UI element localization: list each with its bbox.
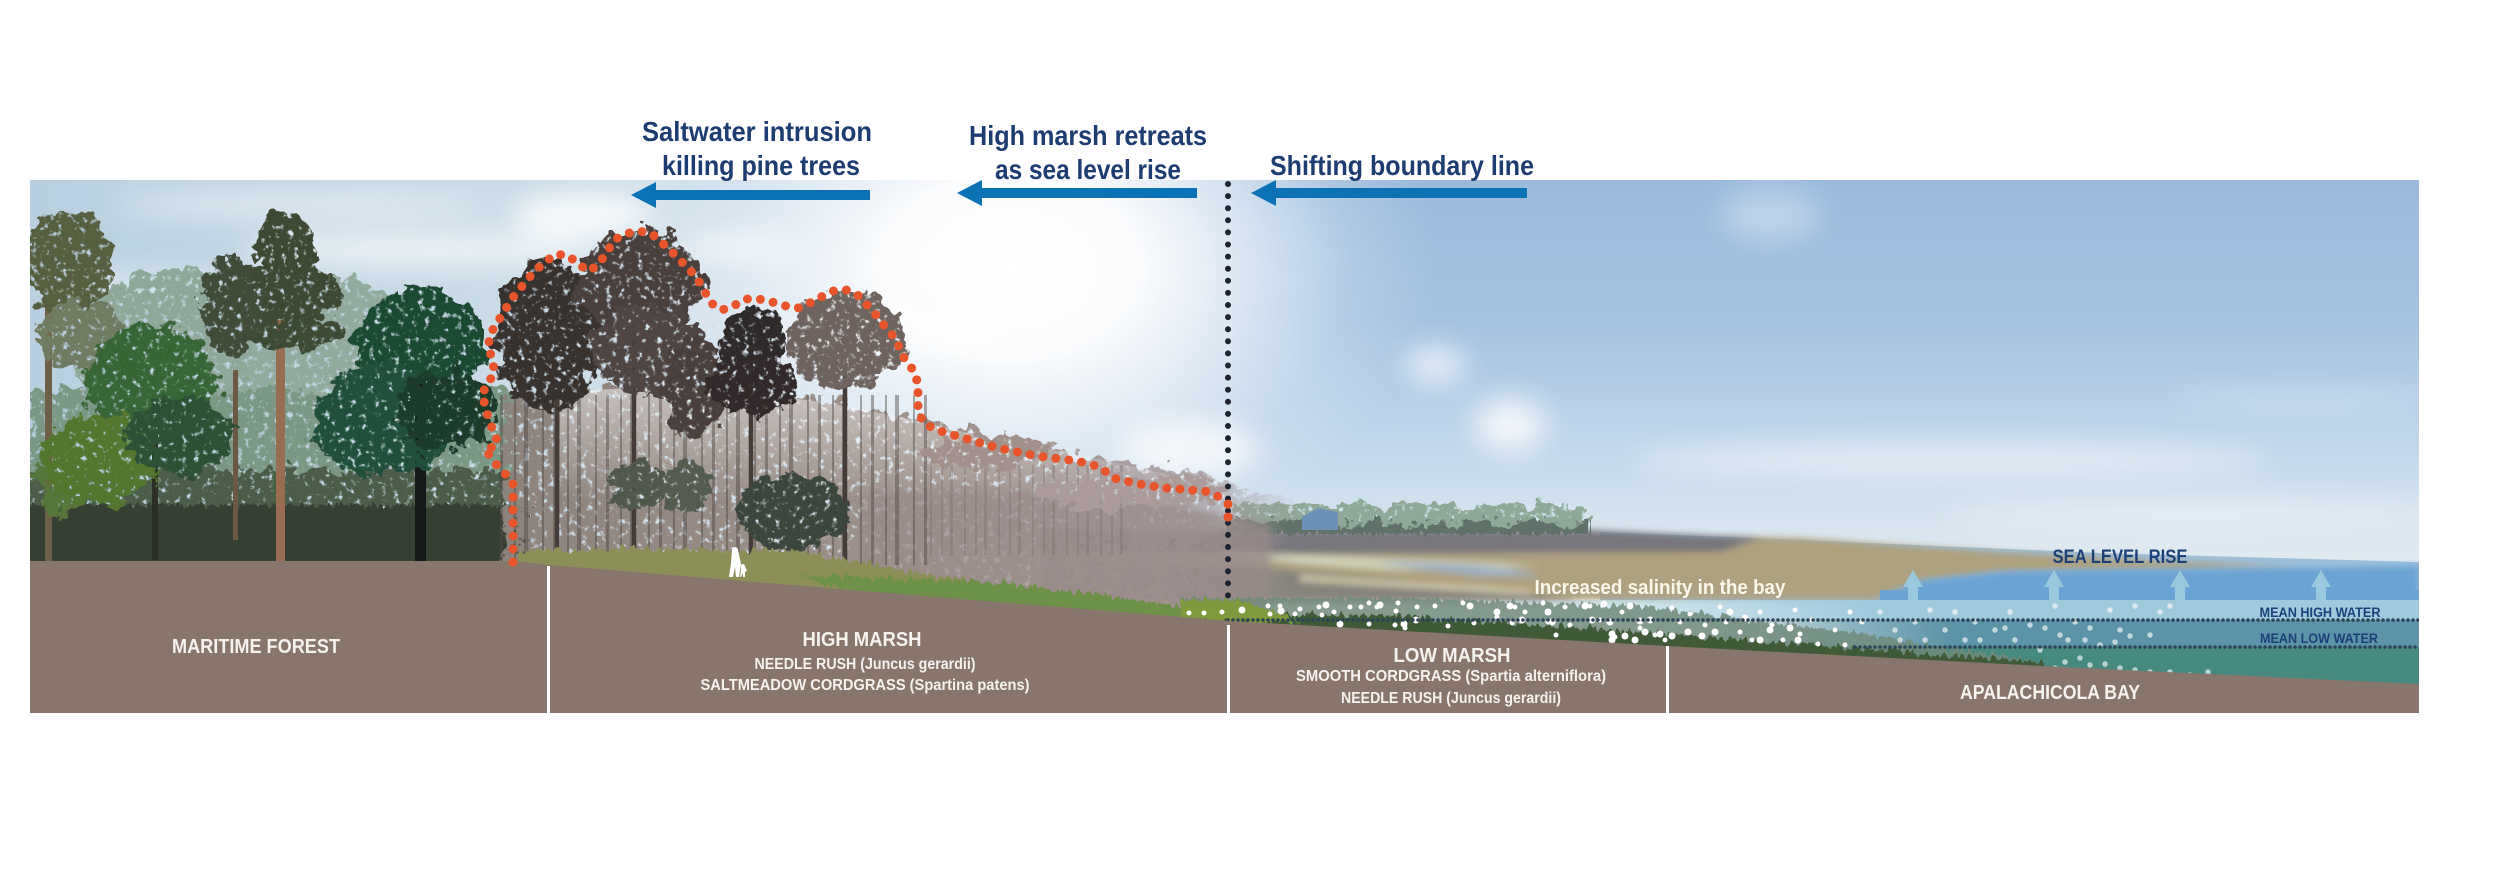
arrow: shifting boundary (1251, 180, 1527, 206)
sea level rise water (1380, 566, 2419, 692)
shifting boundary dotted line (1225, 184, 1231, 596)
heading: saltwater intrusion: killing pine trees (662, 150, 860, 181)
heading: saltwater intrusion: Saltwater intrusion (642, 116, 872, 147)
label: low marsh (1296, 645, 1606, 707)
mean low water dotted line (1855, 645, 2419, 649)
background pale pine forest (30, 270, 520, 520)
label: mean low water: MEAN LOW WATER (2260, 631, 2378, 646)
large white salinity dots (1242, 604, 1798, 640)
green pine at far left (24, 208, 124, 562)
white salinity dots (1189, 603, 1862, 645)
distant open water strip (1600, 532, 2419, 600)
distant tree line and house (1225, 505, 1590, 534)
marsh plain (1040, 530, 2305, 602)
label: sea level rise: SEA LEVEL RISE (2052, 547, 2188, 568)
illustration panel: marsh cross-section scene (30, 180, 2419, 713)
heading: saltwater intrusion (642, 116, 872, 181)
forest understory (20, 470, 530, 565)
arrow: saltwater intrusion (631, 182, 870, 208)
label: apalachicola bay: APALACHICOLA BAY (1960, 682, 2141, 704)
pale upward sea level arrows (1903, 570, 2331, 600)
dark green oak (313, 289, 495, 562)
label: high marsh: NEEDLE RUSH (Juncus gerardii) (754, 656, 976, 673)
sky background (30, 180, 2419, 562)
grey dying pine crowns (495, 231, 1225, 508)
soil cross-section (30, 561, 2419, 713)
low marsh grass (1180, 598, 2045, 672)
high marsh grass (518, 544, 1182, 617)
arrow: high marsh retreats (957, 180, 1197, 206)
heading: high marsh retreats: High marsh retreats (969, 120, 1207, 151)
mid green oak (44, 325, 232, 560)
label: high marsh (700, 629, 1030, 694)
label: high marsh: HIGH MARSH (802, 629, 922, 651)
grey dying forest backdrop (505, 388, 1290, 630)
grey pine trunks (500, 333, 1123, 565)
label: high marsh: SALTMEADOW CORDGRASS (Spartina patens) (700, 677, 1030, 694)
tall pines (202, 211, 346, 562)
label: low marsh: NEEDLE RUSH (Juncus gerardii) (1341, 690, 1561, 707)
label: low marsh: SMOOTH CORDGRASS (Spartia alterniflora) (1296, 668, 1606, 685)
label: increased salinity: Increased salinity in the bay (1534, 577, 1786, 599)
heading: high marsh retreats (969, 120, 1207, 185)
person and child silhouette (729, 547, 747, 577)
faint submerged dots (1880, 606, 2208, 675)
clouds (40, 189, 2460, 531)
label: mean high water: MEAN HIGH WATER (2260, 605, 2381, 620)
mean high water dotted line (1228, 618, 2419, 622)
heading: high marsh retreats: as sea level rise (995, 154, 1181, 185)
heading: shifting boundary line: Shifting boundary line (1270, 150, 1534, 181)
zone dividers (547, 566, 1669, 713)
label: maritime forest: MARITIME FOREST (172, 636, 340, 658)
label: low marsh: LOW MARSH (1394, 645, 1510, 667)
palms and small oak (610, 461, 849, 552)
red dotted outline of dying pines (482, 231, 1228, 562)
